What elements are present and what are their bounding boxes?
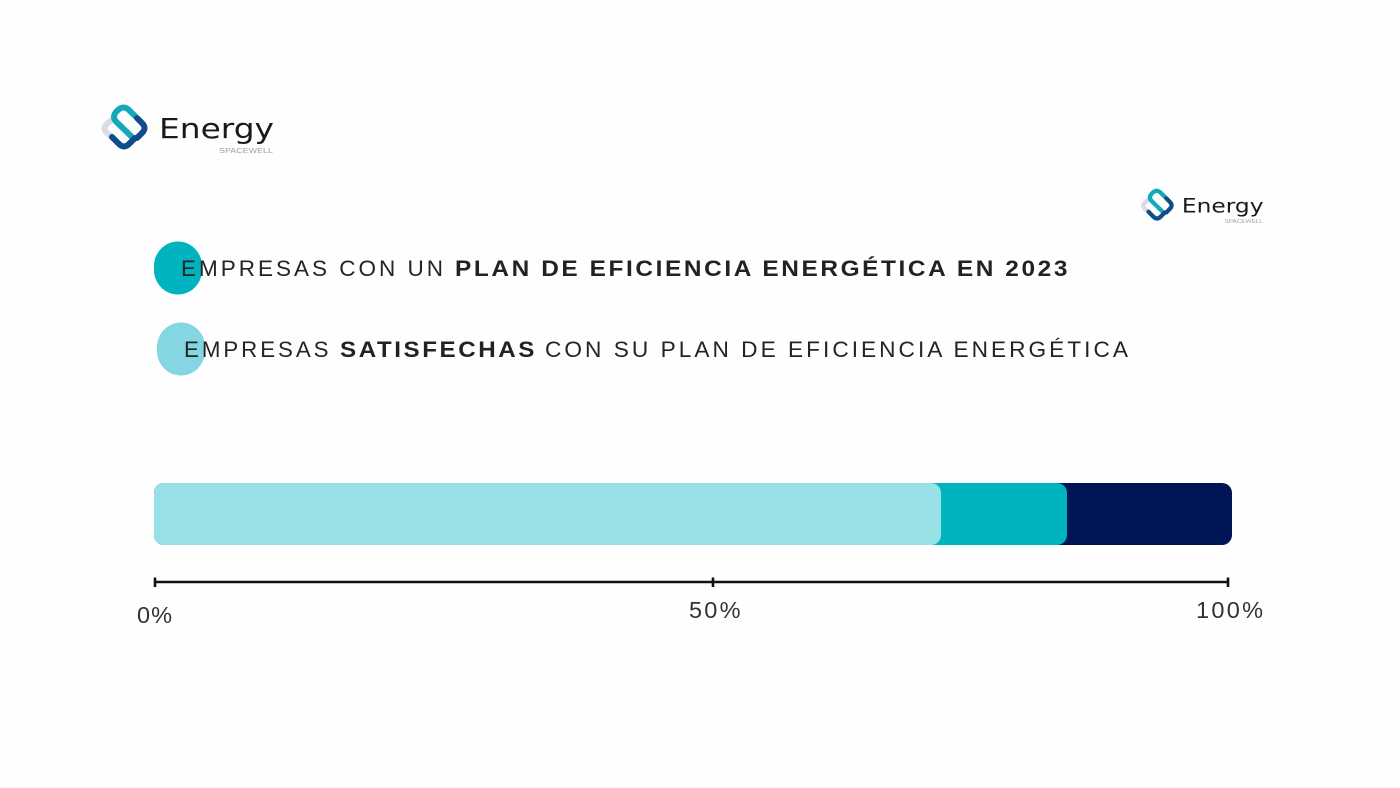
bar segment: teal with plan xyxy=(154,483,1067,545)
legend item: satisfied companies xyxy=(157,322,1131,376)
bar segment: navy remainder xyxy=(154,483,1232,545)
legend swatch: light teal xyxy=(157,322,205,376)
axis 0 to 100 percent xyxy=(137,578,1263,628)
logo: Energy Spacewell large xyxy=(104,108,274,155)
wordmark subtitle small: SPACEWELL xyxy=(1224,219,1263,225)
wordmark subtitle: SPACEWELL xyxy=(219,146,273,155)
legend text: first part: EMPRESAS xyxy=(184,337,332,362)
logo: Energy Spacewell small xyxy=(1143,191,1264,225)
legend text: regular part: EMPRESAS CON UN xyxy=(181,256,446,281)
wordmark small: Energy xyxy=(1182,194,1264,217)
legend text: bold part: SATISFECHAS xyxy=(340,337,537,362)
axis label 100%: 100% xyxy=(1196,597,1263,623)
legend text: last part: CON SU PLAN DE EFICIENCIA ENERGÉTICA xyxy=(545,337,1131,362)
legend text: bold part: PLAN DE EFICIENCIA ENERGÉTICA EN 2023 xyxy=(455,256,1070,281)
wordmark: Energy xyxy=(159,113,274,145)
legend item: companies with a plan xyxy=(154,242,1070,294)
axis line with ticks xyxy=(155,578,1228,587)
legend swatch: teal xyxy=(154,242,202,294)
axis label 0%: 0% xyxy=(137,602,172,628)
bar segment: light teal satisfied xyxy=(154,483,941,545)
icon: linked S mark xyxy=(104,108,144,146)
icon: linked S mark small xyxy=(1143,191,1172,219)
axis label 50%: 50% xyxy=(689,597,741,623)
stacked bar chart xyxy=(154,483,1232,545)
